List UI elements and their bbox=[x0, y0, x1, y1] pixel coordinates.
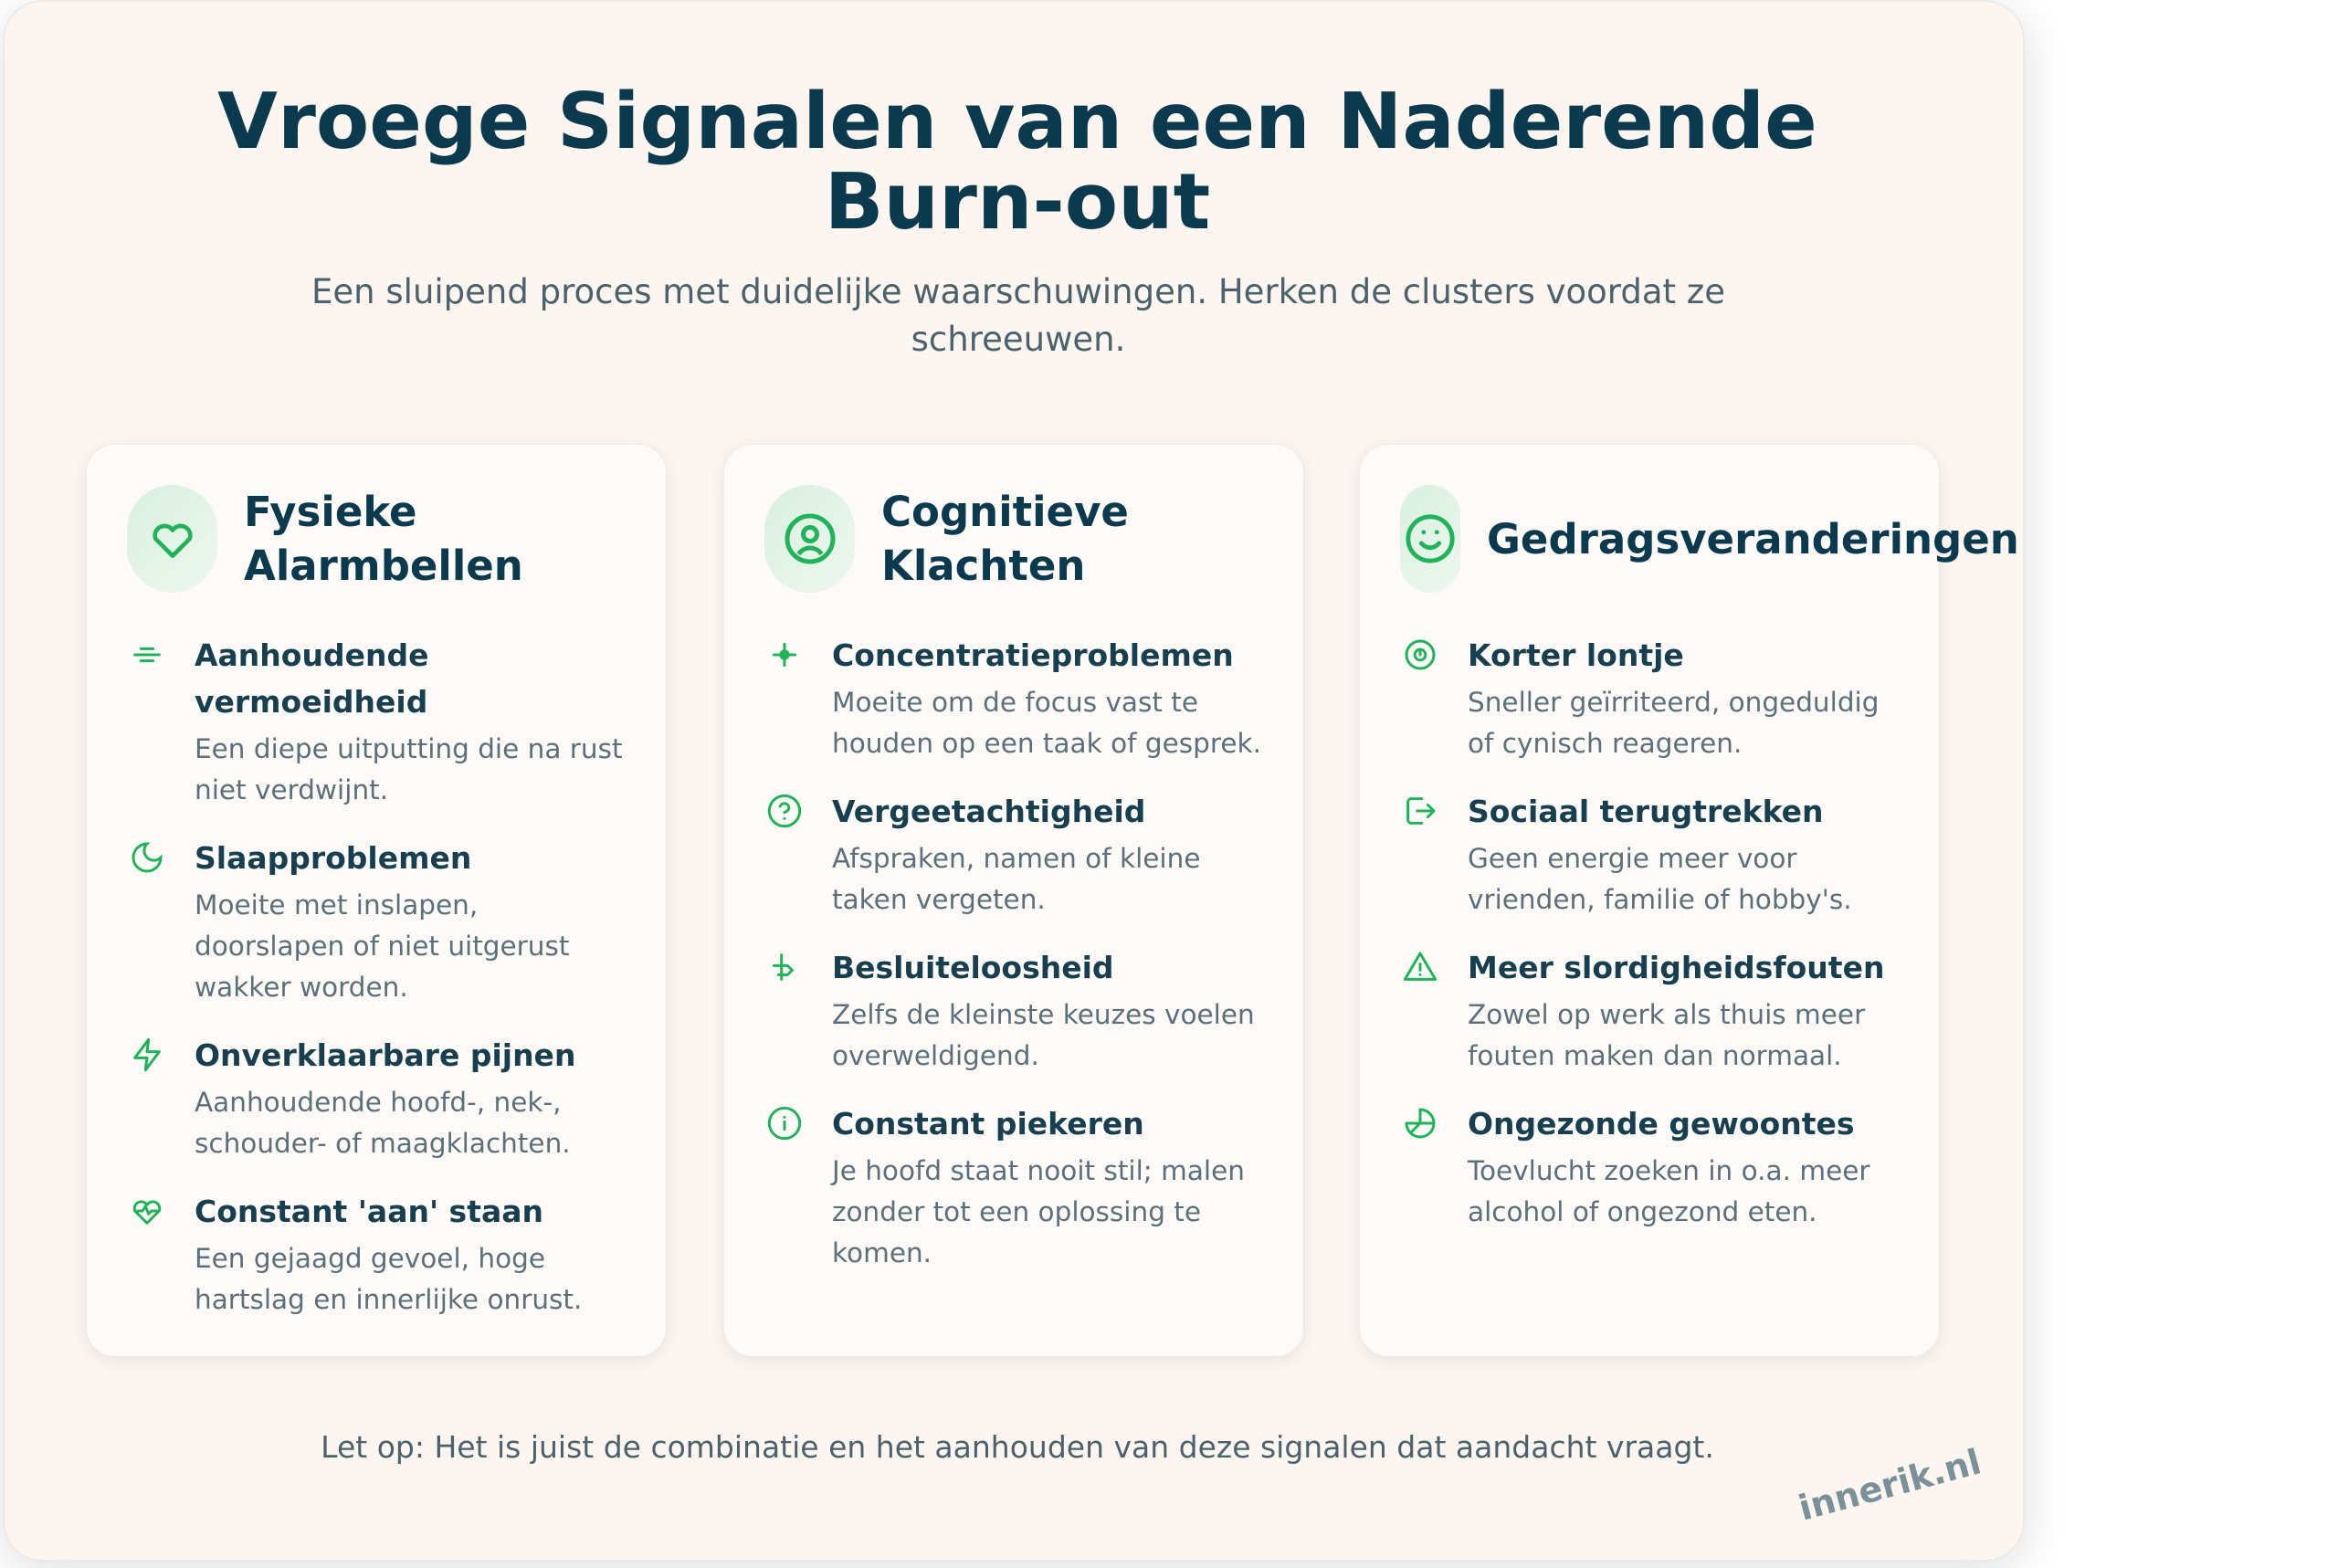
item: vermoeidheid bbox=[133, 637, 623, 805]
item: slaap bbox=[132, 840, 569, 1003]
item: vergeetachtigheid: Vergeetachtigheid bbox=[832, 794, 1145, 829]
item: concentratie bbox=[773, 637, 1261, 759]
item: concentratie: Moeite om de focus vast te houden op een taak of gesprek. bbox=[832, 687, 1261, 759]
panel heading: cognitieve bbox=[764, 485, 1129, 593]
panel heading: cognitieve: Klachten bbox=[881, 542, 1085, 590]
item: aan staan: Constant 'aan' staan bbox=[195, 1194, 543, 1229]
item: lontje: Korter lontje bbox=[1468, 637, 1684, 673]
item: vergeetachtigheid: Afspraken, namen of kleine taken vergeten. bbox=[832, 843, 1200, 915]
item: terugtrekken: Sociaal terugtrekken bbox=[1468, 794, 1824, 829]
item: besluiteloosheid: Zelfs de kleinste keuzes voelen overweldigend. bbox=[832, 999, 1255, 1071]
item: terugtrekken: Geen energie meer voor vrienden, familie of hobby's. bbox=[1468, 843, 1852, 915]
panel heading: fysieke bbox=[127, 485, 523, 593]
item: piekeren: Je hoofd staat nooit stil; malen zonder tot een oplossing te komen. bbox=[832, 1155, 1245, 1268]
item: concentratie: Concentratieproblemen bbox=[832, 637, 1234, 673]
panel heading: fysieke: Alarmbellen bbox=[244, 542, 523, 590]
item: fouten: Meer slordigheidsfouten bbox=[1468, 950, 1884, 985]
item: besluiteloosheid: Besluiteloosheid bbox=[832, 950, 1114, 985]
item: vermoeidheid: Een diepe uitputting die na rust niet verdwijnt. bbox=[195, 733, 623, 805]
item: vermoeidheid: Aanhoudende vermoeidheid bbox=[195, 637, 428, 720]
panel: gedragsveranderingen bbox=[1359, 444, 1940, 1357]
item: gewoontes: Toevlucht zoeken in o.a. meer alcohol of ongezond eten. bbox=[1468, 1155, 1870, 1227]
item: terugtrekken bbox=[1406, 794, 1852, 915]
watermark: innerik.nl bbox=[1795, 1441, 1985, 1529]
item: lontje bbox=[1405, 637, 1879, 759]
title: Vroege Signalen van een Naderende bbox=[217, 77, 1817, 167]
item: aan staan: Een gejaagd gevoel, hoge hartslag en innerlijke onrust. bbox=[195, 1243, 582, 1315]
panel heading: cognitieve: Cognitieve bbox=[881, 488, 1129, 536]
item: slaap: Slaapproblemen bbox=[195, 840, 471, 876]
title bbox=[217, 77, 1817, 247]
subtitle: Een sluipend proces met duidelijke waarschuwingen. Herken de clusters voordat ze schreeuwen. bbox=[311, 272, 1725, 359]
item: aan staan bbox=[133, 1194, 582, 1315]
item: pijnen: Aanhoudende hoofd-, nek-, schouder- of maagklachten. bbox=[195, 1087, 571, 1159]
panel: fysieke alarmbellen bbox=[86, 444, 667, 1357]
footer note: Let op: Het is juist de combinatie en het aanhouden van deze signalen dat aandacht vraagt. bbox=[321, 1429, 1714, 1465]
panel: cognitieve klachten bbox=[723, 444, 1304, 1357]
item: gewoontes bbox=[1405, 1106, 1870, 1227]
panel heading: fysieke: Fysieke bbox=[244, 488, 417, 536]
item: vergeetachtigheid bbox=[767, 794, 1200, 915]
panel heading: gedrag bbox=[1400, 485, 2019, 593]
item: pijnen: Onverklaarbare pijnen bbox=[195, 1037, 575, 1073]
item: slaap: Moeite met inslapen, doorslapen of niet uitgerust wakker worden. bbox=[195, 889, 569, 1003]
item: gewoontes: Ongezonde gewoontes bbox=[1468, 1106, 1855, 1142]
item: fouten: Zowel op werk als thuis meer fouten maken dan normaal. bbox=[1468, 999, 1865, 1071]
item: lontje: Sneller geïrriteerd, ongeduldig of cynisch reageren. bbox=[1468, 687, 1879, 759]
item: pijnen bbox=[133, 1037, 575, 1159]
item: piekeren: Constant piekeren bbox=[832, 1106, 1144, 1142]
panel heading: gedrag: Gedragsveranderingen bbox=[1487, 515, 2019, 563]
item: piekeren bbox=[767, 1106, 1245, 1268]
item: besluiteloosheid bbox=[773, 950, 1255, 1071]
item: fouten bbox=[1403, 950, 1884, 1071]
title: Burn-out bbox=[825, 157, 1210, 247]
